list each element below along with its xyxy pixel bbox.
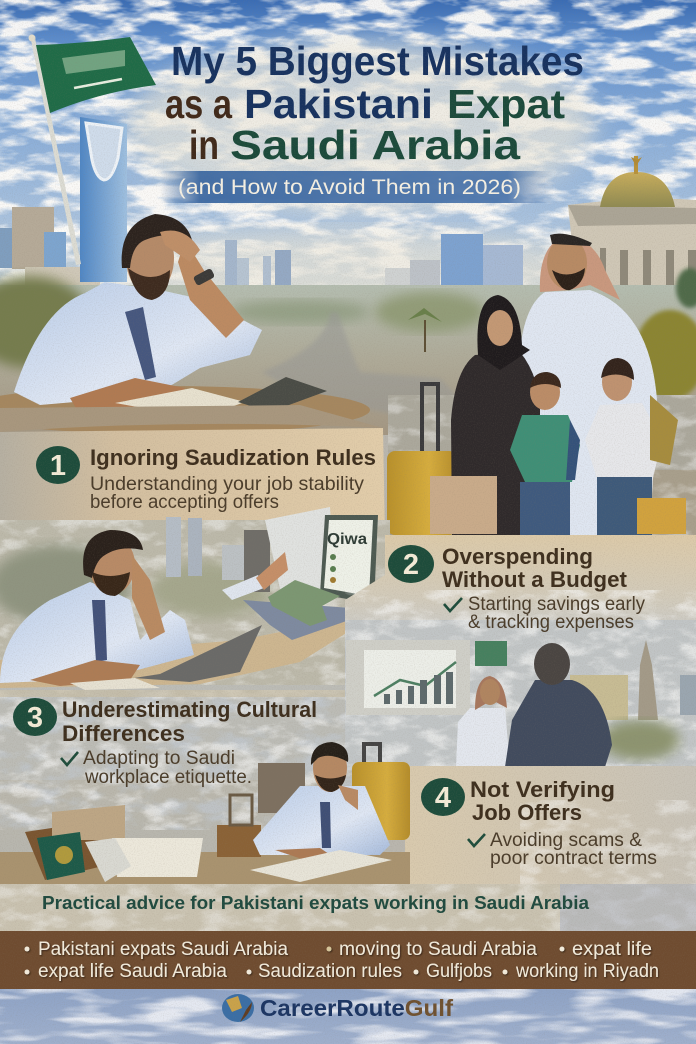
- title: My 5 Biggest Mistakes: [171, 38, 584, 84]
- heading 3: Differences: [62, 721, 185, 746]
- suitcase: [387, 382, 457, 535]
- description 4: [490, 830, 657, 869]
- keyword row one: Pakistani expats Saudi Arabia: [38, 939, 288, 960]
- badge 1: 1: [50, 450, 66, 482]
- heading 1: Ignoring Saudization Rules: [90, 445, 376, 470]
- keyword row one: [24, 939, 652, 960]
- title: Expat: [447, 81, 565, 127]
- tagline text: Practical advice for Pakistani expats working in Saudi Arabia: [42, 893, 590, 913]
- description 2: Starting savings early: [468, 594, 645, 615]
- father in thobe: [520, 234, 657, 535]
- title: as a: [165, 81, 233, 127]
- description 3: [83, 748, 252, 788]
- illustration: passport and paperwork: [25, 805, 203, 882]
- title: Pakistani: [244, 81, 433, 127]
- icon: globe logo: [222, 994, 254, 1022]
- cash: [268, 580, 340, 626]
- mother in abaya: [451, 295, 540, 535]
- description 3: Adapting to Saudi: [83, 748, 235, 769]
- heading 4: Not Verifying: [470, 777, 615, 802]
- keyword row one: moving to Saudi Arabia: [339, 939, 537, 960]
- city skyline: [0, 207, 523, 294]
- landmark: domed building: [568, 156, 696, 300]
- keyword row two: Saudization rules: [258, 961, 402, 982]
- scene: faded city behind man two: [0, 517, 390, 688]
- illustration: man three with luggage and documents: [0, 742, 410, 884]
- panel: mistake 1: [0, 405, 385, 540]
- illustration: stressed man at desk: [0, 214, 370, 434]
- badge 2: 2: [403, 549, 419, 581]
- description 1: Understanding your job stability: [90, 474, 365, 495]
- keyword row two: working in Riyadn: [515, 961, 659, 982]
- keyword band: [0, 931, 696, 989]
- badge 2: [388, 545, 434, 583]
- badge 3: 3: [27, 702, 43, 734]
- icon: check 2: [444, 598, 462, 611]
- badge 1: [36, 446, 80, 484]
- heading 4: [470, 777, 615, 825]
- subtitle text: (and How to Avoid Them in 2026): [178, 176, 521, 199]
- heading 3: Underestimating Cultural: [62, 697, 317, 722]
- tablet: Qiwa: [327, 531, 367, 548]
- heading 2: Overspending: [442, 544, 593, 569]
- description 1: before accepting offers: [90, 492, 279, 513]
- landscape and road: [0, 268, 696, 435]
- description 2: [468, 594, 645, 633]
- description 3: workplace etiquette.: [84, 767, 252, 788]
- shopping bags: [430, 476, 686, 534]
- keyword row two: Gulfjobs: [426, 961, 492, 982]
- man in suit: [505, 643, 612, 767]
- icon: Kingdom Centre tower: [80, 117, 127, 282]
- children: [510, 358, 678, 535]
- heading 4: Job Offers: [472, 800, 582, 825]
- keyword row two: [24, 961, 659, 982]
- arab colleague: [456, 676, 510, 767]
- badge 4: [421, 778, 465, 816]
- title: in: [189, 122, 219, 168]
- badge 3: [13, 698, 57, 736]
- illustration: man two with laptop: [0, 530, 262, 690]
- panel: mistake 3: [0, 690, 345, 788]
- tagline strip: [0, 884, 696, 931]
- sky background: [0, 0, 696, 340]
- panel: mistake 4: [405, 766, 696, 884]
- illustration: documents, Qiwa tablet and cash: [222, 507, 378, 640]
- badge 4: 4: [435, 782, 451, 814]
- heading 2: Without a Budget: [442, 567, 628, 592]
- icon: check 3: [61, 752, 78, 765]
- description 2: & tracking expenses: [468, 612, 634, 633]
- footer background: [0, 989, 696, 1044]
- description 4: poor contract terms: [490, 848, 657, 869]
- illustration: Saudi family with luggage: [387, 234, 696, 535]
- description 4: Avoiding scams &: [490, 830, 642, 851]
- panel: mistake 2: [345, 535, 696, 770]
- logo wordmark: CareerRoute Gulf: [260, 995, 453, 1021]
- illustration: business meeting and growth chart: [346, 640, 696, 767]
- panel: lower background with texture: [0, 520, 696, 890]
- heading 2: [442, 544, 628, 592]
- keyword row two: expat life Saudi Arabia: [38, 961, 227, 982]
- icon: Saudi flag on pole: [28, 34, 156, 265]
- tablet: [320, 515, 378, 604]
- heading 3: [62, 697, 317, 746]
- title: Saudi Arabia: [230, 122, 521, 168]
- description 1: [90, 474, 365, 513]
- subtitle band: [160, 171, 555, 203]
- icon: check 4: [468, 834, 485, 846]
- keyword row one: expat life: [572, 939, 652, 960]
- title: [165, 38, 584, 168]
